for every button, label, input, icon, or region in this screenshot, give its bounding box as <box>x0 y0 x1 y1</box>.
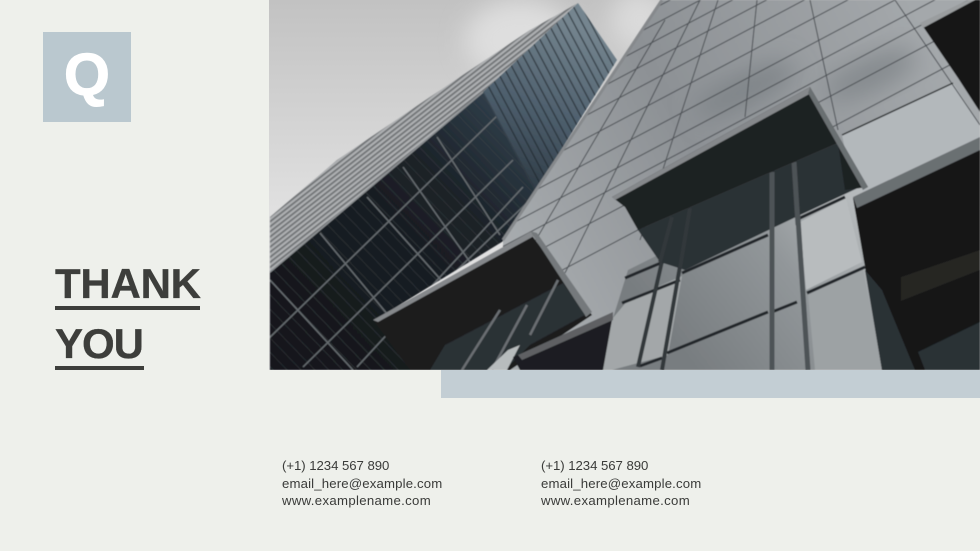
logo: Q badge <box>43 32 131 122</box>
contact block 1: (+1) 1234 567 890 <box>282 458 389 473</box>
lower left canopy <box>373 231 592 370</box>
right tower: reflective glass <box>500 0 980 370</box>
lower windows under main canopy <box>598 158 882 370</box>
left tower: louvred face <box>270 3 578 272</box>
contact block 2: www.examplename.com <box>541 493 690 508</box>
contact block 1 <box>282 458 442 508</box>
title: THANK YOU: YOU <box>55 320 143 367</box>
right canopy <box>853 137 980 370</box>
title: THANK YOU: THANK <box>55 260 201 307</box>
logo: Q badge: Q <box>64 42 110 108</box>
contact block 1: email_here@example.com <box>282 476 442 491</box>
contact block 2 <box>541 458 701 508</box>
main canopy <box>612 87 868 270</box>
title: THANK YOU <box>55 260 201 370</box>
contact block 2: email_here@example.com <box>541 476 701 491</box>
accent bar under photo <box>441 370 980 398</box>
left tower: dark glass face <box>262 90 540 370</box>
sky <box>269 0 980 370</box>
left tower: blue glass face <box>483 3 617 240</box>
contact block 1: www.examplename.com <box>282 493 431 508</box>
top right canopy <box>920 0 980 112</box>
photo: glass office towers <box>269 0 980 370</box>
lower centre canopy <box>513 312 613 370</box>
cloud shading <box>465 0 670 80</box>
contact block 2: (+1) 1234 567 890 <box>541 458 648 473</box>
